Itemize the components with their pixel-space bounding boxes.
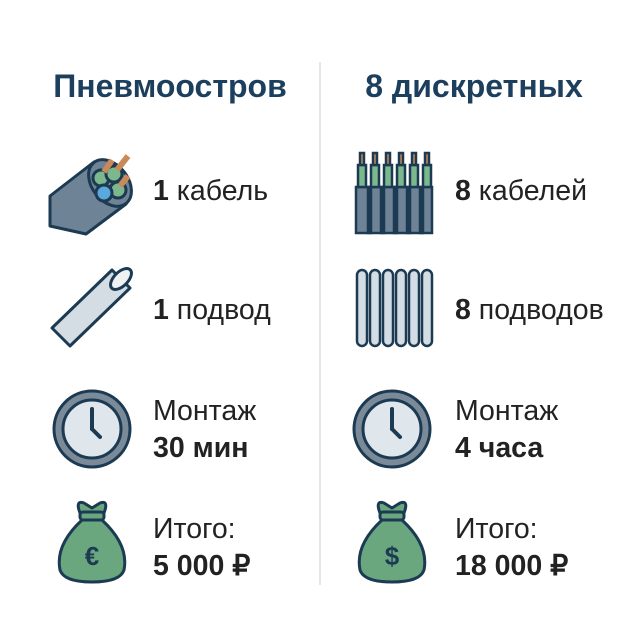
title: right: 8 дискретных	[365, 68, 583, 104]
text: 8 pipes: 8 подводов	[455, 294, 604, 326]
text: montage 30 min: Монтаж	[153, 395, 256, 427]
icon: dollar bag	[359, 502, 425, 582]
text: 1 pipe: 1 подвод	[153, 294, 271, 326]
text: montage 4 hours: Монтаж	[455, 395, 558, 427]
text: 8 cables: 8 кабелей	[455, 175, 587, 207]
icon: euro bag: €	[85, 541, 99, 571]
text: total 5000: 5 000 ₽	[153, 550, 250, 582]
icon: multi-core cable	[50, 151, 140, 234]
icon: pipe	[52, 265, 135, 346]
icon: 8 cables	[356, 153, 432, 233]
text: total 18000: 18 000 ₽	[455, 550, 568, 582]
title: left: Пневмоостров	[53, 68, 287, 104]
icon: clock left	[54, 391, 130, 467]
text: montage 30 min: 30 мин	[153, 432, 248, 464]
icon: dollar bag: $	[385, 541, 400, 571]
text: 1 cable: 1 кабель	[153, 175, 268, 207]
text: montage 4 hours: 4 часа	[455, 432, 544, 464]
icon: clock right	[354, 391, 430, 467]
icon: 8 pipes	[357, 270, 432, 346]
text: total 5000: Итого:	[153, 513, 236, 545]
text: total 18000: Итого:	[455, 513, 538, 545]
icon: euro bag	[59, 502, 125, 582]
